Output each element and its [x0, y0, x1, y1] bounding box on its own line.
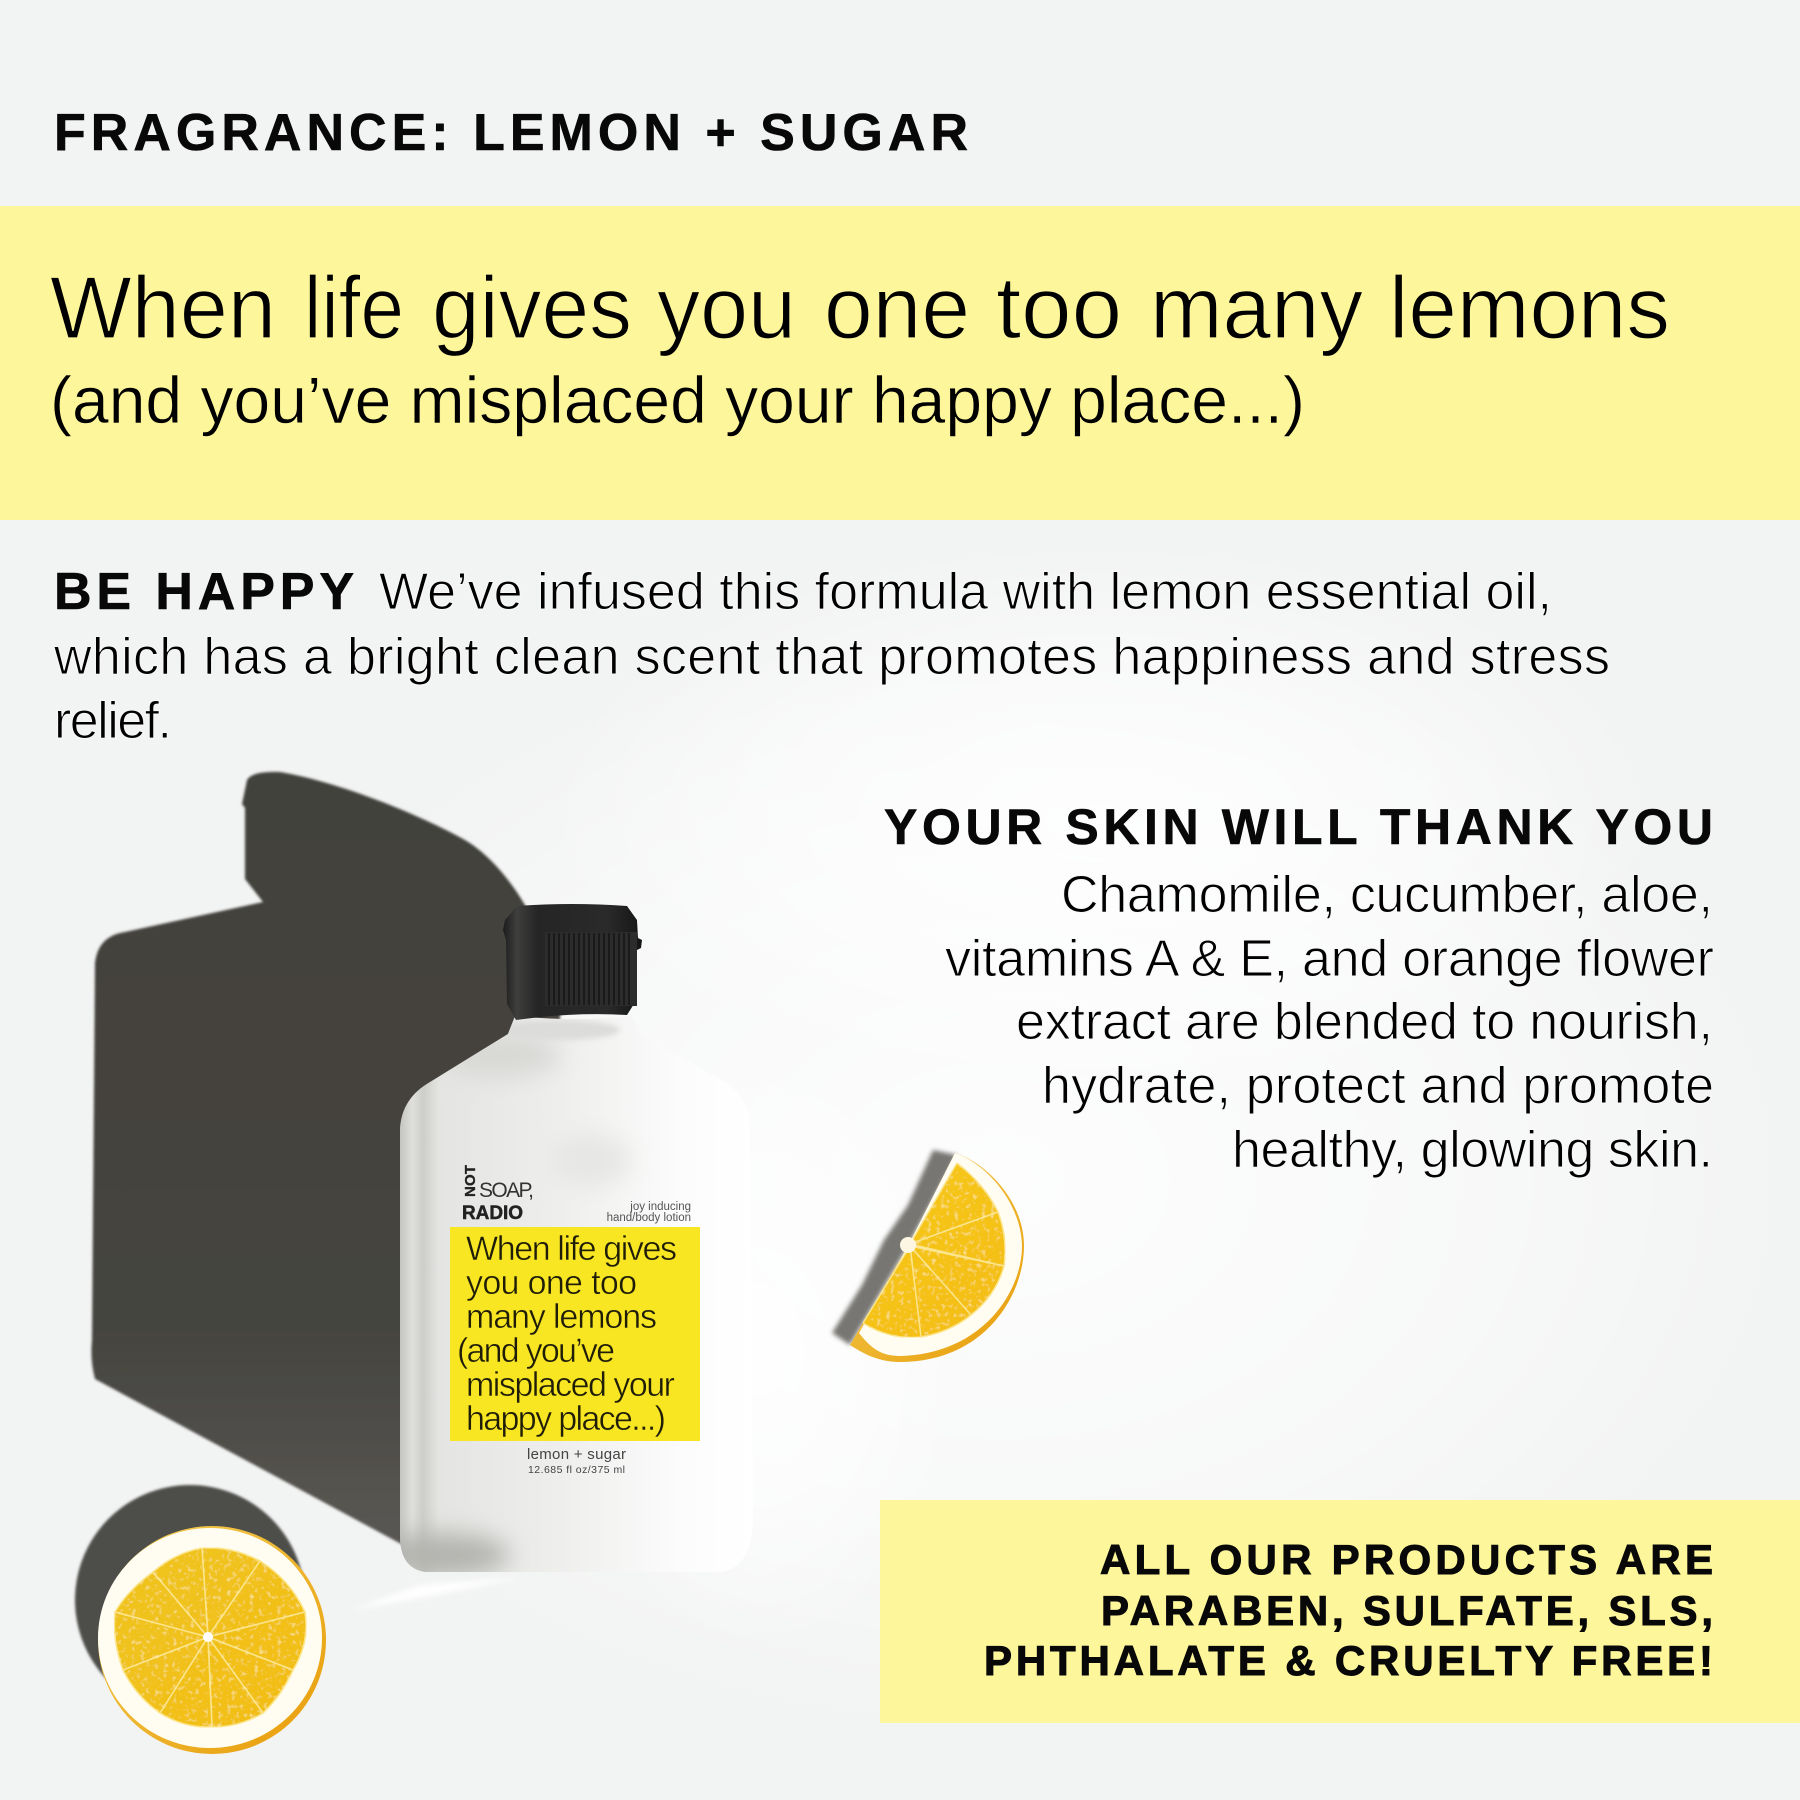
- headline: many: [1150, 258, 1363, 357]
- brand logo: RADIO: [462, 1203, 523, 1224]
- text block: your skin will thank you: YOUR SKIN WILL THANK YOU: [884, 799, 1713, 855]
- bottle label: you one too: [466, 1264, 637, 1302]
- headline: life: [304, 258, 404, 357]
- bottle label: When life gives: [466, 1230, 677, 1268]
- bottle cap: [503, 904, 642, 1020]
- brand logo: [462, 1165, 534, 1224]
- text block: be happy: relief.: [54, 692, 172, 750]
- segments: [114, 1548, 306, 1727]
- text block: be happy: which has a bright clean scent that promotes happiness and stress: [53, 628, 1610, 686]
- title: fragrance: FRAGRANCE: LEMON + SUGAR: [54, 104, 968, 162]
- product type: hand/body lotion: [607, 1212, 691, 1224]
- headline: When: [50, 258, 276, 357]
- headline: [50, 258, 1670, 357]
- text block: be happy: We’ve infused this formula with lemon essential oil,: [379, 563, 1552, 621]
- size text: lemon + sugar: [527, 1446, 626, 1463]
- bottle label: many lemons: [466, 1298, 657, 1336]
- text block: your skin will thank you: Chamomile, cucumber, aloe,: [1061, 866, 1713, 924]
- brand logo: NOT: [462, 1165, 479, 1197]
- text block: your skin will thank you: vitamins A & E, and orange flower: [945, 930, 1714, 988]
- text block: your skin will thank you: extract are blended to nourish,: [1016, 993, 1713, 1051]
- lemon half with shadow: [832, 1150, 1024, 1362]
- headline: too: [996, 258, 1122, 357]
- bottle: [400, 904, 700, 1572]
- headline: you: [657, 258, 796, 357]
- callout: free from: [880, 1500, 1800, 1723]
- bottle body: [400, 1018, 637, 1572]
- callout: free from: PHTHALATE & CRUELTY FREE!: [984, 1637, 1713, 1684]
- segments: [863, 1163, 1005, 1337]
- bottle label: happy place...): [466, 1400, 666, 1438]
- rind: [98, 1526, 326, 1754]
- banner: headline: [0, 206, 1800, 520]
- callout: free from: PARABEN, SULFATE, SLS,: [1101, 1587, 1713, 1634]
- bottle label: (and you’ve: [457, 1332, 615, 1370]
- text block: your skin will thank you: [884, 799, 1714, 1179]
- product type: joy inducing: [629, 1201, 691, 1213]
- brand logo: SOAP,: [479, 1179, 534, 1202]
- text block: your skin will thank you: hydrate, protect and promote: [1042, 1057, 1714, 1115]
- size text: 12.685 fl oz/375 ml: [528, 1464, 625, 1476]
- callout: free from: ALL OUR PRODUCTS ARE: [1100, 1536, 1713, 1583]
- size text: [527, 1446, 626, 1476]
- headline: lemons: [1389, 258, 1670, 357]
- text block: your skin will thank you: healthy, glowing skin.: [1232, 1121, 1713, 1179]
- headline: gives: [432, 258, 632, 357]
- bottle shadow: [91, 772, 560, 1545]
- bottle label: misplaced your: [466, 1366, 675, 1404]
- product type: [607, 1201, 691, 1224]
- headline: one: [824, 258, 970, 357]
- text block: be happy: [53, 563, 1610, 750]
- text block: be happy: BE HAPPY: [54, 563, 354, 621]
- whole lemon slice with shadow: [75, 1485, 326, 1754]
- sub-headline: (and you’ve misplaced your happy place...): [50, 363, 1305, 437]
- rind: [850, 1153, 1024, 1362]
- bottle label: [450, 1227, 700, 1441]
